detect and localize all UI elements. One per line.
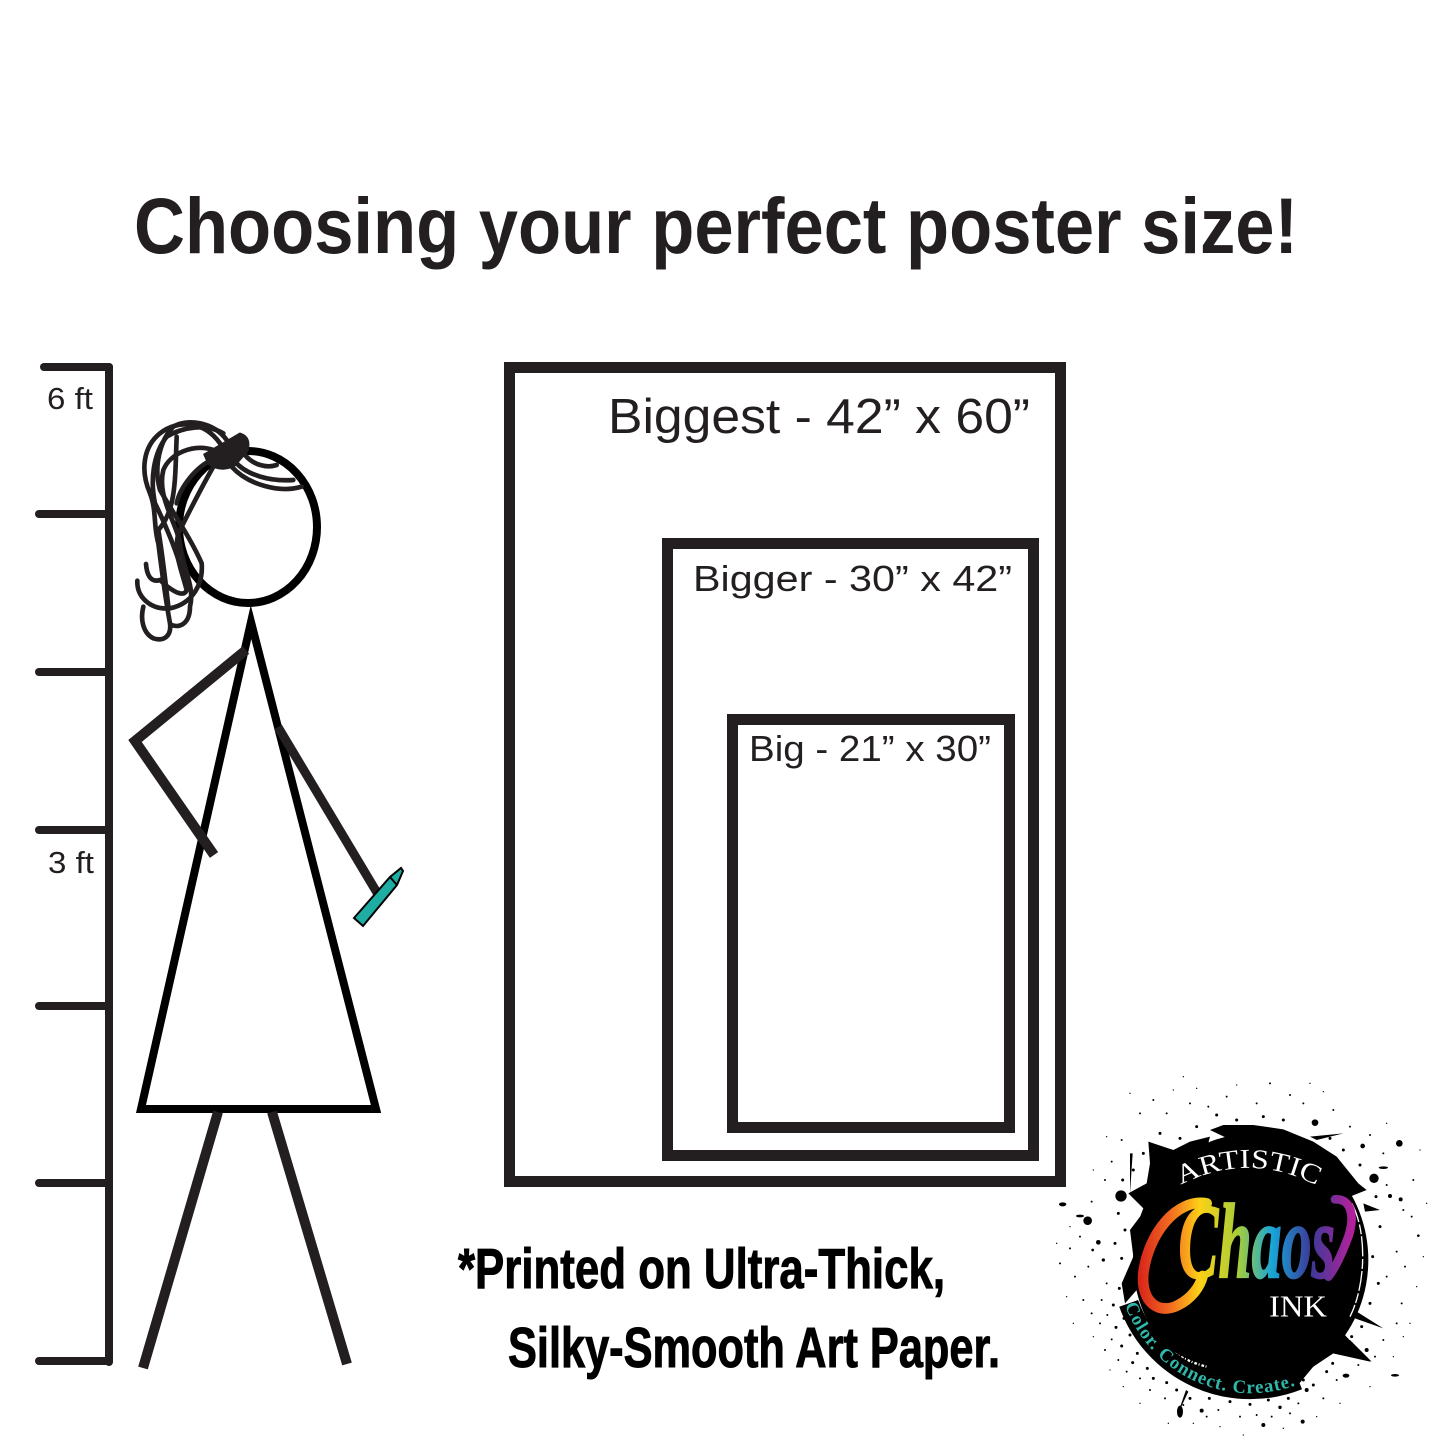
logo ink splat bbox=[1057, 1077, 1427, 1435]
ruler label: 6 ft: 6 ft bbox=[47, 381, 93, 416]
figure legs bbox=[143, 1112, 347, 1368]
logo swash: s flourish bbox=[1328, 1199, 1352, 1277]
figure right arm bbox=[278, 727, 379, 896]
figure dress bbox=[141, 622, 376, 1109]
title: Choosing your perfect poster size! bbox=[134, 181, 1298, 270]
ruler label: 3 ft: 3 ft bbox=[48, 845, 94, 880]
poster: bigger bbox=[668, 544, 1034, 1156]
paper note: Silky-Smooth Art Paper. bbox=[508, 1316, 1000, 1380]
height ruler bbox=[39, 367, 109, 1362]
stick figure woman bbox=[135, 422, 403, 1368]
paper note bbox=[458, 1237, 1000, 1380]
poster: biggest bbox=[510, 368, 1060, 1182]
label: big: Big - 21” x 30” bbox=[749, 728, 991, 769]
logo text: Artistic: ARTISTIC bbox=[1180, 1150, 1322, 1184]
figure hair and ponytail bbox=[137, 422, 302, 639]
paper note: *Printed on Ultra-Thick, bbox=[458, 1237, 945, 1301]
label: bigger: Bigger - 30” x 42” bbox=[693, 558, 1012, 599]
logo tagline: Color. Connect. Create. bbox=[1126, 1302, 1294, 1394]
logo: Artistic Chaos Ink bbox=[1056, 1076, 1428, 1436]
logo text: Ink: INK bbox=[1269, 1290, 1327, 1324]
logo ring highlight bbox=[1160, 1203, 1363, 1367]
icon: teal crayon bbox=[354, 868, 403, 926]
label: biggest: Biggest - 42” x 60” bbox=[608, 390, 1030, 444]
poster: big bbox=[732, 720, 1010, 1128]
figure head bbox=[179, 451, 317, 603]
logo swash: C outer stroke bbox=[1143, 1203, 1207, 1309]
figure left arm bbox=[135, 650, 246, 855]
logo tagline band bbox=[1129, 1303, 1298, 1389]
